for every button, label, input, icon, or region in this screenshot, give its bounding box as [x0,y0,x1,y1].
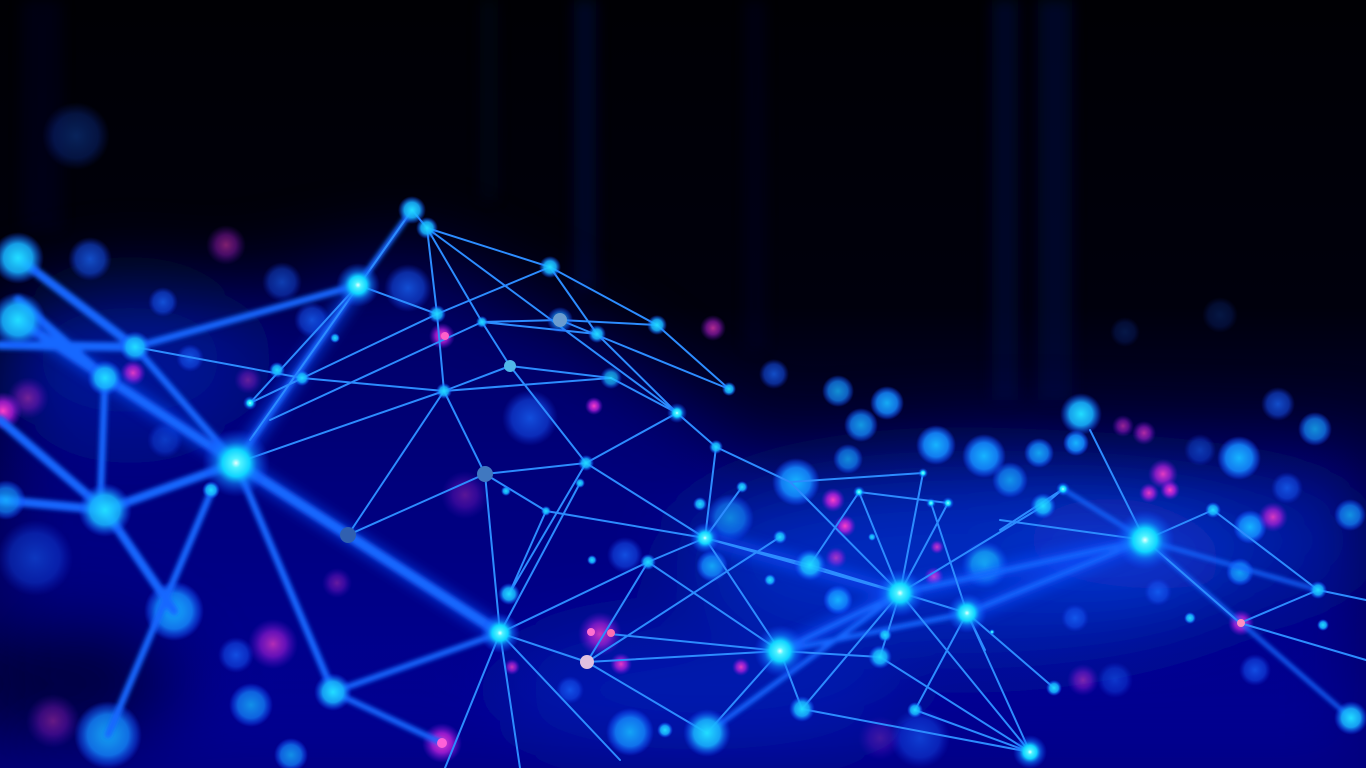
thick network links [0,210,1351,743]
blue haze [0,250,1366,768]
vertical background bars [22,0,1072,400]
magenta accent nodes [0,225,1288,763]
thin network mesh [135,210,1366,768]
glowing network nodes [0,196,1366,768]
soft glow under links [18,285,1145,651]
